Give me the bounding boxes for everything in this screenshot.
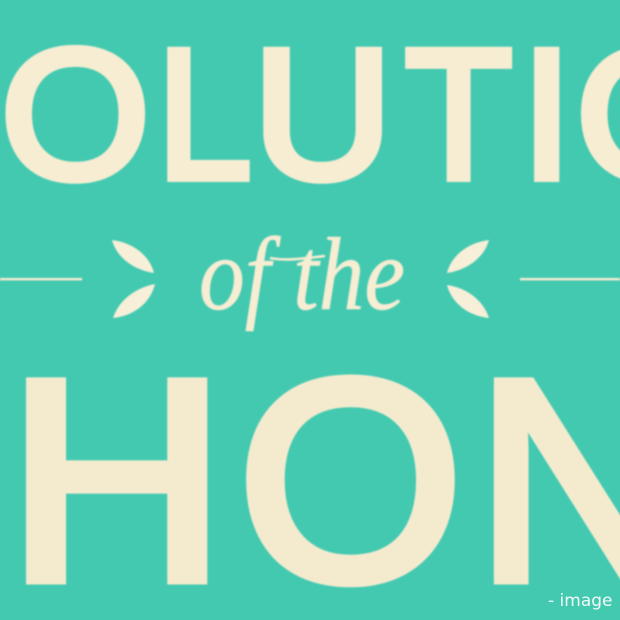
heading: top word: O: [0, 10, 150, 217]
heading: bottom word: [7, 321, 620, 620]
right divider line: [520, 278, 620, 280]
icon: right leaves: [447, 240, 489, 318]
left divider line: [0, 278, 82, 280]
image caption: - image: [548, 591, 612, 611]
heading: top word: T: [405, 12, 512, 218]
heading: top word: I: [521, 12, 572, 218]
heading: top word: [0, 10, 620, 218]
subtitle: of the: of the: [199, 217, 405, 332]
icon: left leaves: [112, 240, 155, 318]
heading: top word: L: [157, 10, 252, 218]
heading: top word: U: [252, 11, 393, 218]
